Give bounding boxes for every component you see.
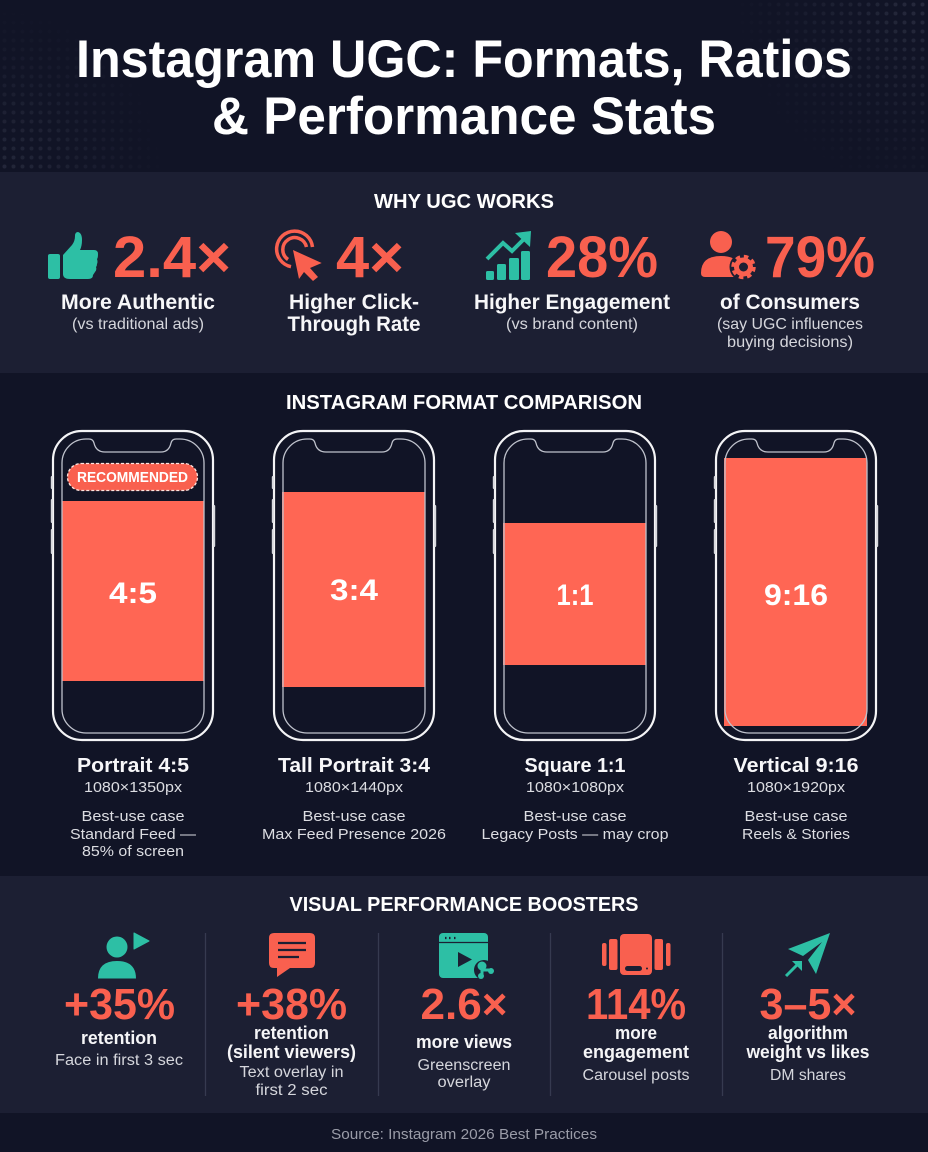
booster: face in first 3 sec: retention	[81, 1028, 157, 1048]
icon: carousel cards	[602, 934, 670, 975]
booster: text overlay: retention	[254, 1023, 329, 1043]
icon: paper plane	[786, 933, 830, 976]
caption: square 1:1: Square 1:1	[524, 755, 626, 777]
title	[76, 30, 852, 146]
caption: vertical 9:16: Reels & Stories	[742, 826, 850, 843]
icon: person with gear	[701, 231, 758, 281]
badge: recommended: RECOMMENDED	[77, 470, 188, 486]
caption: vertical 9:16: Best-use case	[744, 808, 848, 825]
stat: 2.4x more authentic	[48, 225, 231, 333]
caption: vertical 9:16: Vertical 9:16	[734, 755, 858, 777]
booster: greenscreen overlay: Greenscreen	[418, 1057, 510, 1074]
booster: carousel posts: 114%	[586, 980, 686, 1029]
caption: square 1:1: Best-use case	[524, 808, 626, 825]
stat: 2.4x more authentic: (vs traditional ads)	[72, 316, 204, 333]
phone: portrait 4:5	[52, 431, 214, 740]
badge: recommended	[68, 464, 198, 490]
phone: square 1:1	[494, 431, 656, 740]
panel: why UGC works	[0, 172, 928, 373]
caption: portrait 4:5: 85% of screen	[82, 843, 184, 860]
phone: square 1:1: 1:1	[556, 579, 594, 612]
stat: 28% higher engagement: Higher Engagement	[474, 291, 670, 314]
title: & Performance Stats	[212, 87, 716, 146]
stat: 4x click-through rate: Through Rate	[288, 313, 420, 336]
caption: tall portrait 3:4: Tall Portrait 3:4	[278, 755, 431, 777]
icon: thumbs up	[48, 232, 98, 279]
panel: visual performance boosters	[0, 876, 928, 1113]
source footer: Source: Instagram 2026 Best Practices	[331, 1127, 597, 1143]
heading: format comparison: INSTAGRAM FORMAT COMPARISON	[286, 392, 642, 414]
stat: 2.4x more authentic: 2.4×	[113, 225, 231, 290]
booster: face in first 3 sec: +35%	[64, 980, 175, 1029]
stat: 28% higher engagement: (vs brand content)	[506, 316, 638, 333]
stat: 4x click-through rate: Higher Click-	[289, 291, 419, 314]
booster: text overlay: first 2 sec	[256, 1082, 328, 1099]
booster: DM shares: DM shares	[770, 1067, 846, 1084]
booster: text overlay: Text overlay in	[240, 1064, 344, 1081]
heading: visual performance boosters: VISUAL PERFORMANCE BOOSTERS	[290, 894, 638, 916]
booster: carousel posts: Carousel posts	[582, 1067, 690, 1084]
title: Instagram UGC: Formats, Ratios	[76, 30, 852, 89]
icon: chat bubble	[269, 933, 315, 977]
caption: tall portrait 3:4: Best-use case	[302, 808, 406, 825]
stat: 79% of consumers	[701, 225, 875, 351]
booster: greenscreen overlay: overlay	[438, 1074, 491, 1091]
caption: portrait 4:5: Portrait 4:5	[77, 755, 189, 777]
phone: tall portrait 3:4	[273, 431, 435, 740]
booster: text overlay: (silent viewers)	[227, 1042, 356, 1062]
caption: vertical 9:16	[734, 755, 858, 843]
booster: face in first 3 sec: Face in first 3 sec	[55, 1052, 183, 1069]
booster: greenscreen overlay: more views	[416, 1032, 512, 1052]
caption: tall portrait 3:4: Max Feed Presence 2026	[262, 826, 446, 843]
booster: carousel posts: engagement	[583, 1042, 689, 1062]
booster: carousel posts	[582, 934, 690, 1084]
booster: DM shares: 3–5×	[760, 980, 856, 1029]
phone: portrait 4:5: 4:5	[109, 577, 157, 610]
icon: person with play	[98, 933, 149, 978]
booster: carousel posts: more	[615, 1023, 657, 1043]
stat: 79% of consumers: (say UGC influences	[717, 316, 863, 333]
heading: why UGC works: WHY UGC WORKS	[374, 191, 554, 213]
phone: vertical 9:16: 9:16	[764, 579, 828, 612]
caption: portrait 4:5: Standard Feed —	[70, 826, 196, 843]
booster: face in first 3 sec	[55, 933, 183, 1069]
caption: square 1:1: 1080×1080px	[526, 779, 625, 796]
icon: rising bar chart	[486, 231, 531, 280]
icon: click target cursor	[277, 231, 322, 281]
booster: DM shares: algorithm	[768, 1023, 848, 1043]
booster: greenscreen overlay	[416, 933, 512, 1091]
stat: 28% higher engagement: 28%	[546, 225, 658, 290]
caption: tall portrait 3:4	[262, 755, 446, 843]
booster: greenscreen overlay: 2.6×	[420, 980, 508, 1029]
stat: 79% of consumers: of Consumers	[720, 291, 860, 314]
caption: portrait 4:5	[70, 755, 196, 860]
stat: 79% of consumers: buying decisions)	[727, 334, 853, 351]
caption: portrait 4:5: Best-use case	[82, 808, 184, 825]
stat: 79% of consumers: 79%	[765, 225, 875, 290]
caption: square 1:1: Legacy Posts — may crop	[482, 826, 668, 843]
booster: DM shares: weight vs likes	[746, 1042, 870, 1062]
caption: tall portrait 3:4: 1080×1440px	[305, 779, 404, 796]
icon: video window	[439, 933, 494, 980]
caption: portrait 4:5: 1080×1350px	[84, 779, 183, 796]
phone: tall portrait 3:4: 3:4	[330, 574, 378, 607]
booster: text overlay	[227, 933, 356, 1099]
stat: 4x click-through rate: 4×	[336, 225, 404, 290]
booster: text overlay: +38%	[236, 980, 347, 1029]
phone: vertical 9:16	[715, 431, 877, 740]
caption: vertical 9:16: 1080×1920px	[747, 779, 846, 796]
caption: square 1:1	[482, 755, 668, 843]
stat: 28% higher engagement	[474, 225, 670, 333]
stat: 4x click-through rate	[277, 225, 420, 336]
booster: DM shares	[746, 933, 870, 1084]
stat: 2.4x more authentic: More Authentic	[61, 291, 215, 314]
